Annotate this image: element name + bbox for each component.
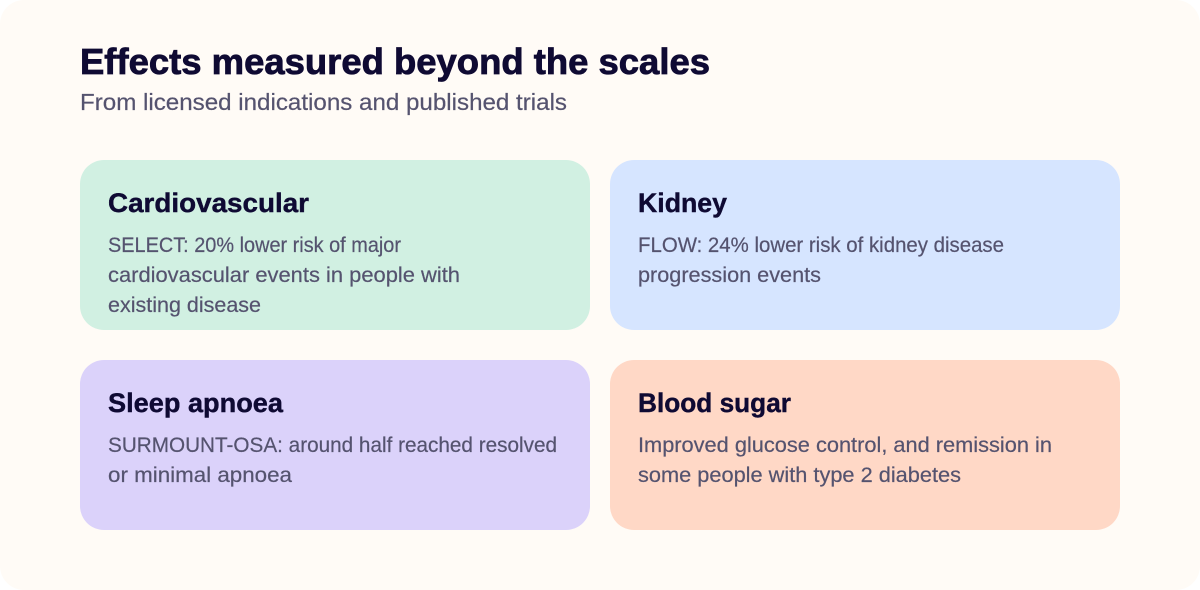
title: Effects measured beyond the scales [80,41,710,82]
text: kidney detail: FLOW: 24% lower risk of kidney disease [638,234,1004,257]
heading: blood sugar: Blood sugar [638,388,791,418]
text: sleep apnoea detail: SURMOUNT-OSA: around half reached resolved [108,434,557,457]
text: cardiovascular detail: existing disease [108,294,261,317]
text: cardiovascular detail: SELECT: 20% lower risk of major [108,234,401,257]
text: blood sugar detail: Improved glucose control, and remission in [638,434,1052,457]
text: cardiovascular detail: cardiovascular events in people with [108,264,460,287]
panel: kidney [610,160,1120,330]
subtitle: From licensed indications and published trials [80,89,567,115]
text: blood sugar detail: some people with type 2 diabetes [638,464,961,487]
text: kidney detail: progression events [638,264,821,287]
text: sleep apnoea detail: or minimal apnoea [108,464,292,487]
panel: sleep apnoea [80,360,590,530]
text: blood sugar detail [638,434,1052,487]
panel: blood sugar [610,360,1120,530]
text: kidney detail [638,234,1004,287]
heading: sleep apnoea: Sleep apnoea [108,388,284,418]
panel: cardiovascular [80,160,590,330]
heading: kidney: Kidney [638,188,727,218]
text: sleep apnoea detail [108,434,557,487]
text: cardiovascular detail [108,234,460,317]
heading: cardiovascular: Cardiovascular [108,188,310,218]
